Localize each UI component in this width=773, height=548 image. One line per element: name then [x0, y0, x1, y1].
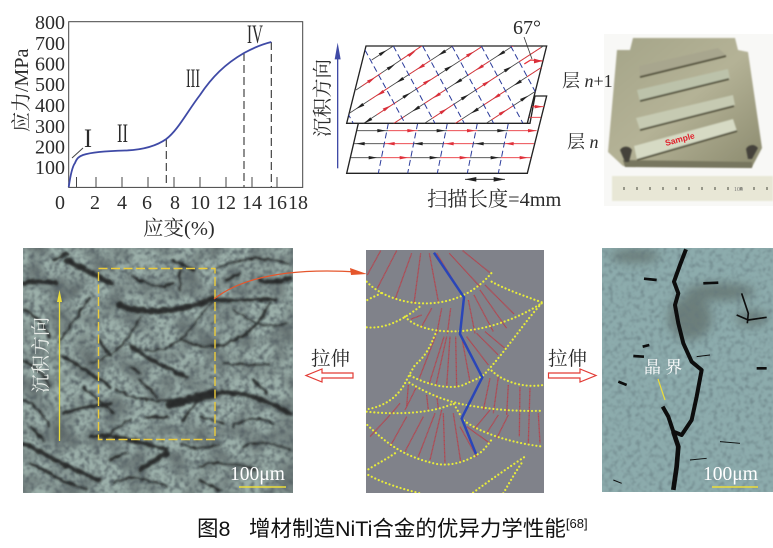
- red arrowheads: [367, 51, 507, 116]
- black arrowheads: [356, 50, 528, 123]
- grain boundary label: 晶 界: [644, 358, 682, 377]
- phase labels: III: [186, 64, 200, 93]
- ruler: [612, 176, 773, 201]
- layer n+1 label: 层 n+1: [562, 71, 613, 91]
- grain boundary dotted arcs: [367, 271, 543, 495]
- x axis ticks: [76, 177, 277, 187]
- scale label: 100μm: [703, 464, 758, 485]
- x axis labels: 10: [190, 192, 210, 214]
- deposited strips: [620, 48, 758, 162]
- left micrograph: [23, 248, 293, 493]
- y axis labels: 400: [35, 95, 65, 117]
- grain growth lines: [367, 251, 540, 463]
- darkened upper regions: [610, 249, 768, 340]
- build direction arrow: [58, 296, 60, 441]
- phase boundary dashed lines: [166, 42, 271, 187]
- left tensile arrow: 拉伸: [311, 348, 350, 370]
- scale bar: [239, 486, 286, 488]
- phase I leader: [72, 148, 83, 158]
- chart axes frame: [69, 22, 303, 187]
- x axis labels: 16: [267, 192, 287, 214]
- scale bar: [712, 486, 758, 488]
- figure caption: 增材制造NiTi合金的优异力学性能: [249, 517, 566, 541]
- y axis labels: [35, 12, 65, 179]
- x axis labels: 12: [216, 192, 236, 214]
- crack path: [434, 253, 482, 454]
- metal plate: [608, 38, 762, 167]
- x axis labels: 18: [288, 192, 308, 214]
- build direction label: 沉积方向: [312, 59, 334, 137]
- layer n+1: [346, 45, 548, 124]
- scan length label: 扫描长度=4mm: [427, 188, 561, 211]
- 67 degree leader: [524, 37, 532, 59]
- phase labels: IV: [247, 20, 263, 49]
- right micrograph: [602, 248, 773, 492]
- x axis labels: 0: [55, 192, 65, 214]
- figure caption: 图8: [197, 517, 230, 541]
- x axis labels: 8: [170, 192, 180, 214]
- 67 degree label: 67°: [513, 17, 541, 39]
- x axis labels: 6: [142, 192, 152, 214]
- grain boundary leader: [658, 379, 665, 400]
- y axis labels: 300: [35, 116, 65, 138]
- y axis title: 应力/MPa: [10, 49, 33, 132]
- y axis labels: 800: [35, 12, 65, 34]
- crack: [613, 249, 767, 490]
- ruler: 100: [734, 187, 743, 193]
- zoom connector arrow: [214, 268, 367, 299]
- x axis labels: 2: [90, 192, 100, 214]
- micrograph texture: [602, 248, 773, 492]
- scan strategy diagram: [312, 17, 561, 218]
- centre grain schematic: [366, 250, 544, 495]
- right tensile arrow: 拉伸: [548, 348, 587, 370]
- stress-strain chart: [10, 12, 308, 240]
- phase labels: [84, 20, 263, 153]
- phase labels: II: [117, 119, 128, 148]
- right tensile arrow: [548, 348, 596, 382]
- y axis labels: 100: [35, 157, 65, 179]
- x axis title: 应变(%): [143, 217, 215, 240]
- y axis labels: 200: [35, 137, 65, 159]
- left tensile arrow: [306, 348, 353, 382]
- sample plate photograph: [562, 34, 773, 206]
- y axis labels: 700: [35, 33, 65, 55]
- y axis labels: 600: [35, 54, 65, 76]
- scale label: 100μm: [230, 464, 285, 485]
- y axis labels: 500: [35, 74, 65, 96]
- photo background: [604, 34, 773, 206]
- micrograph texture: [23, 248, 293, 493]
- build direction label: 沉积方向: [30, 317, 52, 393]
- build direction arrow: [336, 50, 340, 168]
- selected region box: [98, 268, 215, 440]
- x axis labels: 14: [242, 192, 262, 214]
- layer n label: 层 n: [567, 132, 598, 152]
- figure caption: [68]: [566, 516, 588, 531]
- scan length arrow: [465, 178, 505, 181]
- sample label: Sample: [664, 130, 696, 148]
- layer n: [347, 96, 547, 173]
- schematic background: [366, 250, 544, 493]
- x axis labels: 4: [117, 192, 127, 214]
- stress-strain curve: [69, 42, 271, 187]
- phase labels: I: [84, 124, 92, 153]
- x axis labels: [55, 192, 308, 214]
